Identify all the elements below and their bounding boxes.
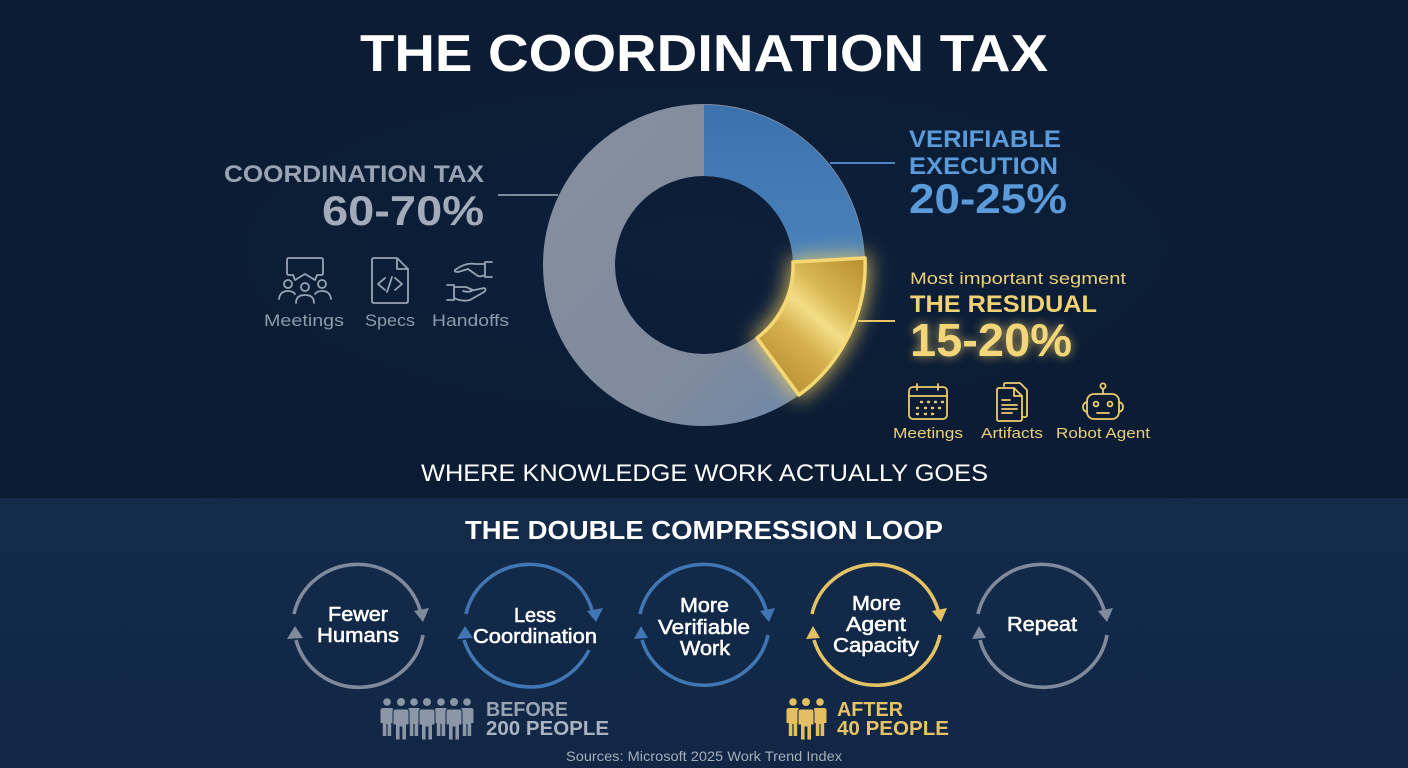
label: before 200 people: BEFORE xyxy=(486,699,568,721)
loop: more verifiable work xyxy=(634,564,775,685)
loop: more agent capacity xyxy=(806,564,947,685)
text: repeat: Repeat xyxy=(1007,614,1077,636)
sources: Sources: Microsoft 2025 Work Trend Index xyxy=(566,748,842,764)
label: after 40 people: AFTER xyxy=(837,699,904,721)
icon: before people group xyxy=(380,698,474,740)
text: more agent capacity: Agent xyxy=(846,614,907,636)
value: 15-20%: 15-20% xyxy=(910,314,1072,366)
segment glow: residual xyxy=(757,258,865,395)
chart caption: WHERE KNOWLEDGE WORK ACTUALLY GOES xyxy=(421,460,988,487)
value: 60-70%: 60-70% xyxy=(322,187,484,234)
icon: robot agent xyxy=(1083,383,1123,419)
icon: after people group xyxy=(786,698,826,740)
label: verifiable execution: VERIFIABLE xyxy=(909,126,1061,153)
text: less coordination: Coordination xyxy=(473,626,597,648)
icon: handoffs xyxy=(447,262,492,301)
label: before 200 people xyxy=(486,699,609,740)
label: handoffs: Handoffs xyxy=(432,311,509,330)
text: more verifiable work: Work xyxy=(680,638,731,660)
label: after 40 people xyxy=(837,699,949,740)
loop: fewer humans xyxy=(287,564,429,687)
leader line: coordination tax xyxy=(498,194,558,196)
leader line: verifiable execution xyxy=(830,162,895,164)
text: more verifiable work: More xyxy=(680,595,729,617)
text: fewer humans: Fewer xyxy=(328,604,388,626)
label: specs: Specs xyxy=(365,311,415,330)
text: fewer humans: Humans xyxy=(317,625,399,647)
text: more verifiable work: Verifiable xyxy=(658,617,750,639)
segment: coordination tax xyxy=(579,140,829,390)
label: coordination tax: COORDINATION TAX xyxy=(224,161,484,188)
title: THE COORDINATION TAX xyxy=(360,25,1048,83)
label: verifiable execution xyxy=(909,126,1067,222)
label line: 200 people: 200 PEOPLE xyxy=(486,718,609,740)
heading: the residual: THE RESIDUAL xyxy=(910,291,1097,318)
loop: repeat xyxy=(972,564,1113,687)
icon: calendar xyxy=(909,384,947,419)
right icon row xyxy=(893,383,1151,442)
label line: 40 people: 40 PEOPLE xyxy=(837,718,949,740)
label: meetings: Meetings xyxy=(893,425,963,442)
loop: less coordination xyxy=(457,564,603,687)
label: coordination tax xyxy=(224,161,484,234)
donut chart xyxy=(579,105,865,395)
text: more agent capacity xyxy=(833,593,919,657)
text: less coordination xyxy=(473,605,597,648)
icon: artifacts xyxy=(997,383,1027,421)
section heading: double compression loop: THE DOUBLE COMPRESSION LOOP xyxy=(465,515,943,545)
background: top section xyxy=(0,0,1408,498)
left icon row xyxy=(264,258,509,330)
value: 20-25%: 20-25% xyxy=(909,175,1067,222)
label: the residual: Most important segment xyxy=(910,269,1126,288)
text: more agent capacity: More xyxy=(852,593,901,615)
label: meetings: Meetings xyxy=(264,311,344,330)
text: less coordination: Less xyxy=(514,605,556,627)
text: fewer humans xyxy=(317,604,399,647)
background: bottom section xyxy=(0,498,1408,768)
label: artifacts: Artifacts xyxy=(981,425,1043,442)
icon: meetings xyxy=(279,258,331,303)
text: more agent capacity: Capacity xyxy=(833,635,919,657)
label line: execution: EXECUTION xyxy=(909,153,1058,180)
text: more verifiable work xyxy=(658,595,750,660)
segment: the residual xyxy=(757,258,865,395)
segment: verifiable execution xyxy=(704,105,864,262)
value glow: 15-20%: 15-20% xyxy=(910,314,1072,366)
label: robot agent: Robot Agent xyxy=(1056,425,1151,442)
label: the residual xyxy=(910,269,1126,366)
leader line: residual xyxy=(858,320,895,322)
icon: specs xyxy=(372,258,408,303)
